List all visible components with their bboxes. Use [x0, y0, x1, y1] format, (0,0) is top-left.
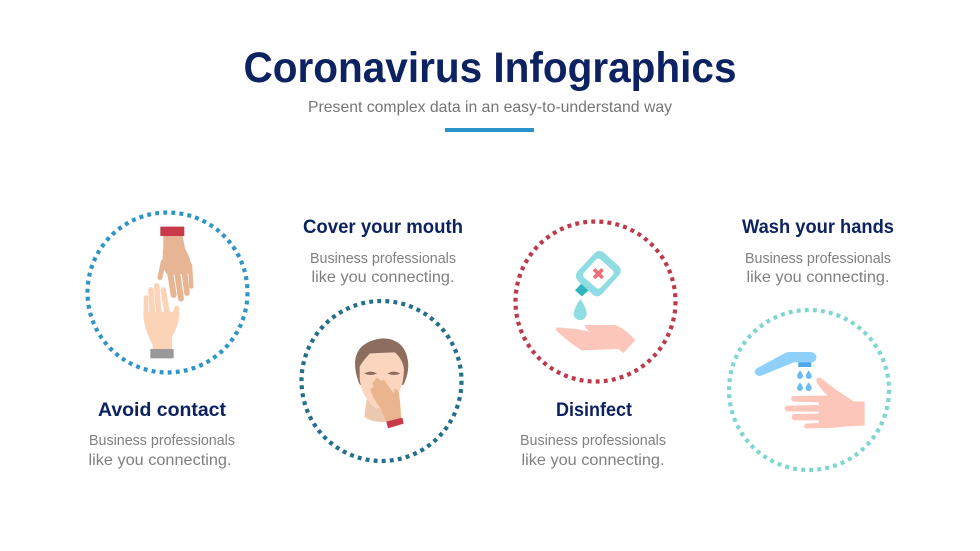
text: wash your hands: [745, 250, 891, 286]
text: wash your hands: Business professionals: [745, 250, 891, 267]
title: Coronavirus Infographics: [244, 44, 736, 92]
text: avoid contact: Business professionals: [89, 432, 235, 449]
text: cover your mouth: Business professionals: [310, 250, 456, 267]
panel: wash your hands: [729, 217, 894, 470]
dotted ring: disinfect: [516, 222, 676, 382]
icon: sanitizer bottle and hand: [556, 251, 635, 353]
text: cover your mouth: like you connecting.: [312, 269, 454, 286]
text: wash your hands: like you connecting.: [746, 269, 890, 286]
heading: avoid contact: Avoid contact: [98, 400, 227, 421]
icon: face with hand over mouth: [355, 338, 408, 428]
title underline: [445, 128, 534, 132]
text: avoid contact: [88, 432, 235, 469]
text: disinfect: [520, 432, 666, 469]
dotted ring: cover your mouth: [302, 301, 462, 461]
subtitle: Present complex data in an easy-to-understand way: [308, 99, 672, 116]
dotted ring: avoid contact: [88, 212, 248, 372]
panel: disinfect: [516, 222, 676, 469]
heading: disinfect: Disinfect: [556, 400, 633, 421]
icon: tap and washing hand: [755, 352, 865, 428]
panel: cover your mouth: [302, 217, 463, 461]
heading: cover your mouth: Cover your mouth: [303, 217, 463, 238]
heading: wash your hands: Wash your hands: [742, 217, 894, 238]
text: avoid contact: like you connecting.: [88, 452, 232, 469]
dotted ring: wash your hands: [729, 310, 889, 470]
text: cover your mouth: [310, 250, 456, 286]
text: disinfect: like you connecting.: [522, 452, 664, 469]
icon: two hands reaching: [143, 227, 193, 358]
text: disinfect: Business professionals: [520, 432, 666, 449]
panel: avoid contact: [88, 212, 248, 469]
